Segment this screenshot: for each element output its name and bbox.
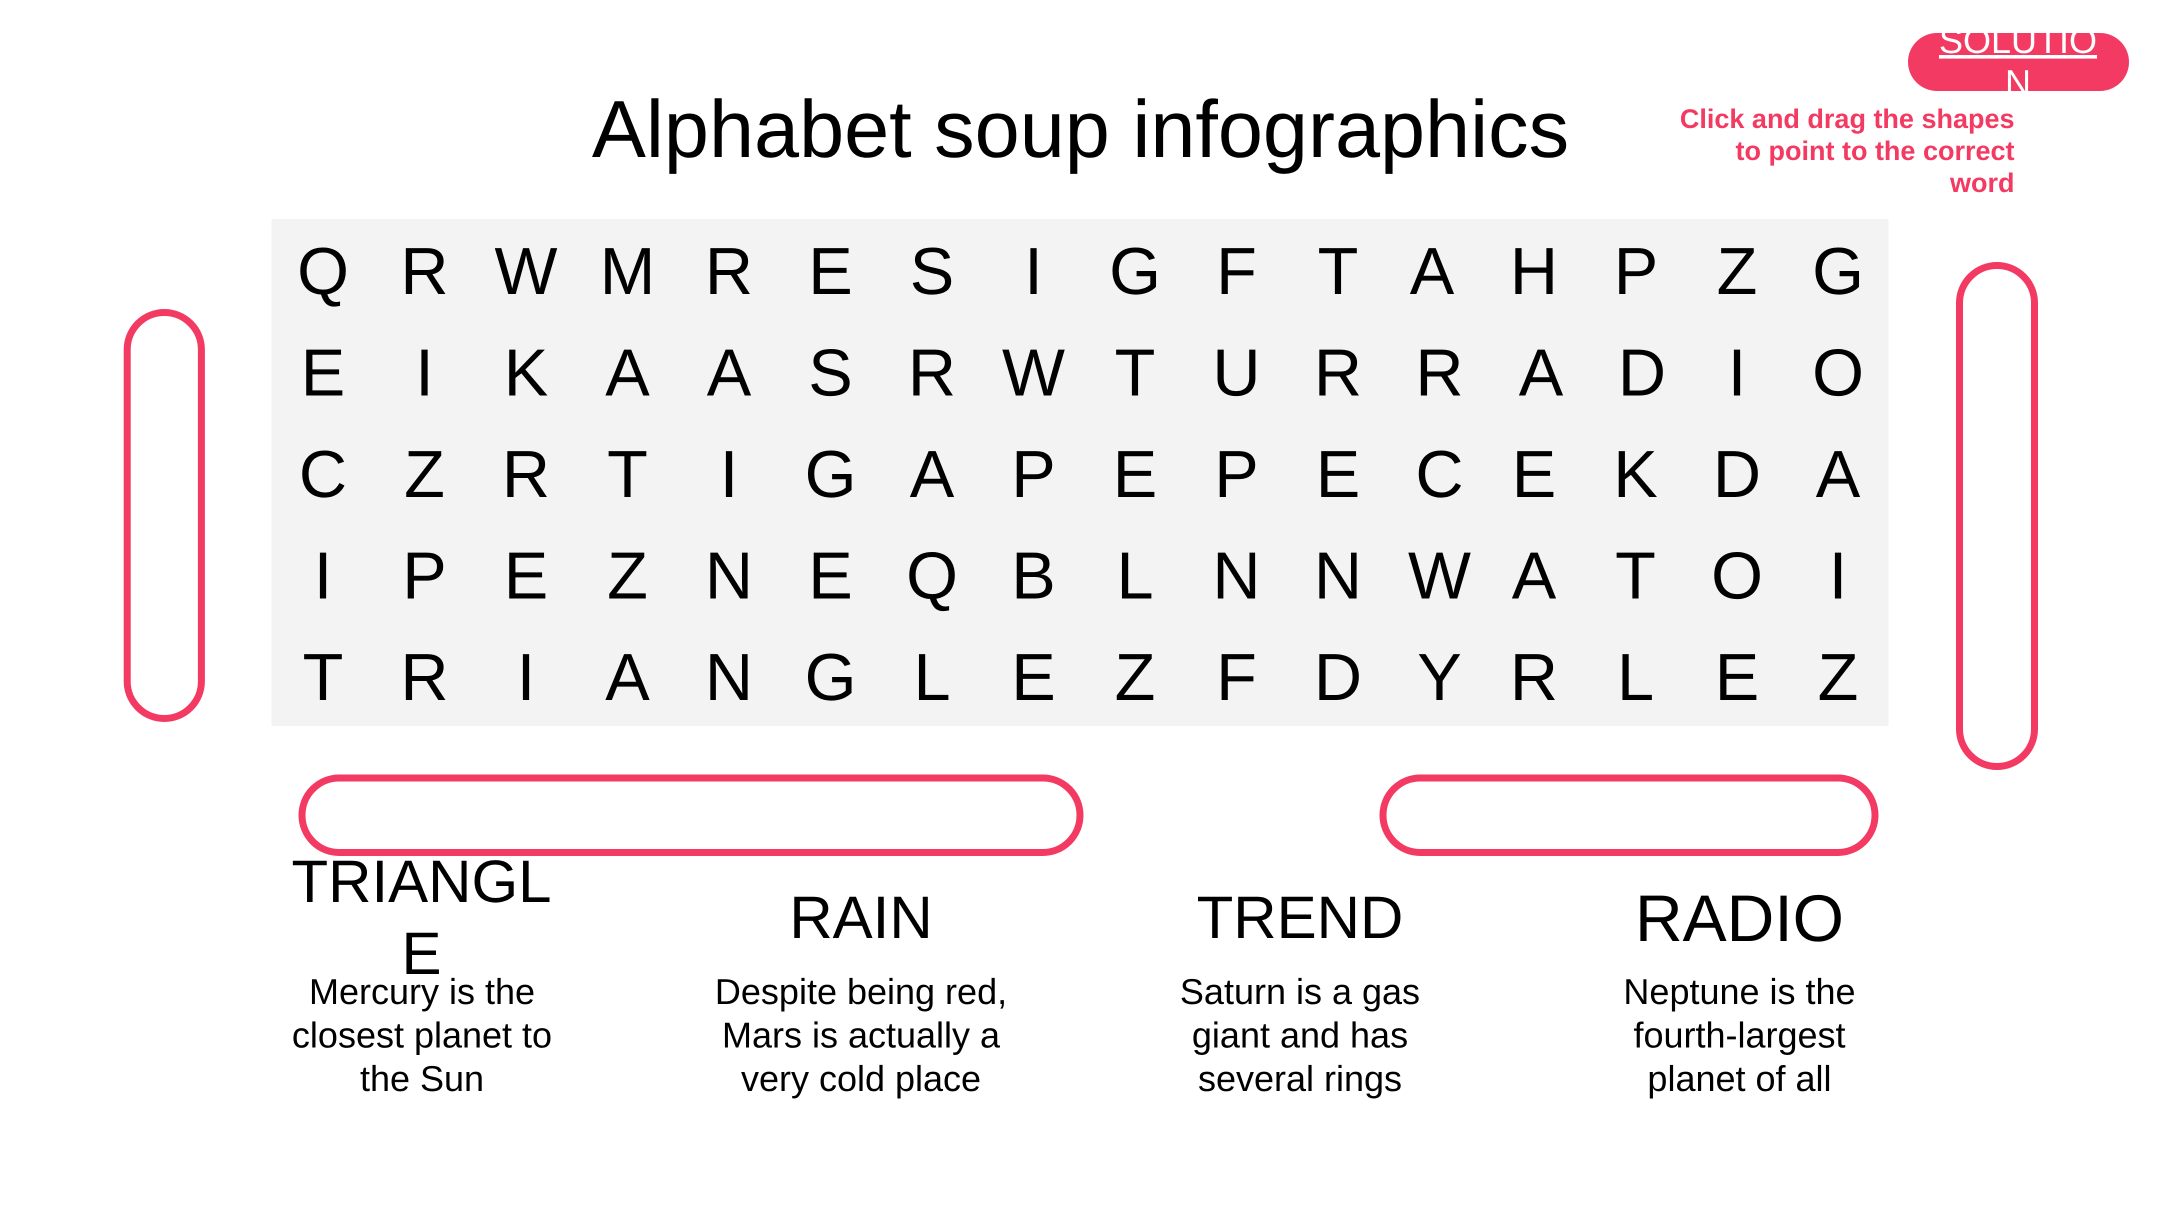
word block: RADIO: planet of all — [1647, 1058, 1832, 1099]
word block: RADIO: fourth-largest — [1633, 1014, 1846, 1056]
instruction text: word — [1949, 168, 2014, 198]
word block: TRIANGLE: the Sun — [360, 1058, 484, 1099]
word block: RADIO: RADIO — [1635, 881, 1844, 955]
word block: RAIN: RAIN — [789, 884, 933, 951]
solution button: SOLUTIO — [1939, 20, 2097, 61]
solution button: N — [2005, 62, 2031, 103]
panel: letter grid — [272, 219, 1888, 726]
word block: RAIN — [715, 884, 1007, 1099]
word block: TREND: TREND — [1197, 884, 1403, 951]
grid row 2: EIKAASRWTURRADIO — [301, 336, 1864, 410]
word block: TRIANGLE: Mercury is the — [309, 971, 535, 1012]
grid row 1: QRWMRESIGFTAHPZG — [297, 235, 1864, 309]
word block: TREND: giant and has — [1192, 1014, 1408, 1056]
word block: RAIN: very cold place — [741, 1058, 981, 1099]
word block: TRIANGLE: TRIANGL — [291, 848, 552, 915]
word block: TREND: several rings — [1198, 1058, 1402, 1099]
word block: RAIN: Mars is actually a — [722, 1014, 1001, 1056]
instruction text: to point to the correct — [1736, 136, 2014, 166]
title: Alphabet soup infographics — [592, 85, 1569, 175]
grid row 4: IPEZNEQBLNNWATOI — [314, 540, 1847, 614]
grid row 3: CZRTIGAPEPECEKDA — [299, 438, 1861, 512]
solution button — [1908, 20, 2129, 103]
shape: long horizontal pill — [302, 778, 1080, 852]
grid row 5: TRIANGLEZFDYRLEZ — [303, 641, 1858, 715]
instruction text: Click and drag the shapes — [1680, 104, 2014, 134]
word block: TRIANGLE: E — [401, 920, 442, 987]
shape: short horizontal pill — [1383, 778, 1875, 852]
shape: right vertical pill — [1960, 266, 2034, 766]
word block: RAIN: Despite being red, — [715, 971, 1007, 1012]
word block: TREND: Saturn is a gas — [1180, 971, 1420, 1012]
word block: TREND — [1180, 884, 1420, 1099]
word block: RADIO: Neptune is the — [1623, 971, 1856, 1012]
word block: TRIANGLE — [291, 848, 552, 1099]
shape: left vertical pill — [127, 312, 201, 718]
word block: RADIO — [1623, 881, 1856, 1099]
word block: TRIANGLE: closest planet to — [292, 1014, 552, 1056]
